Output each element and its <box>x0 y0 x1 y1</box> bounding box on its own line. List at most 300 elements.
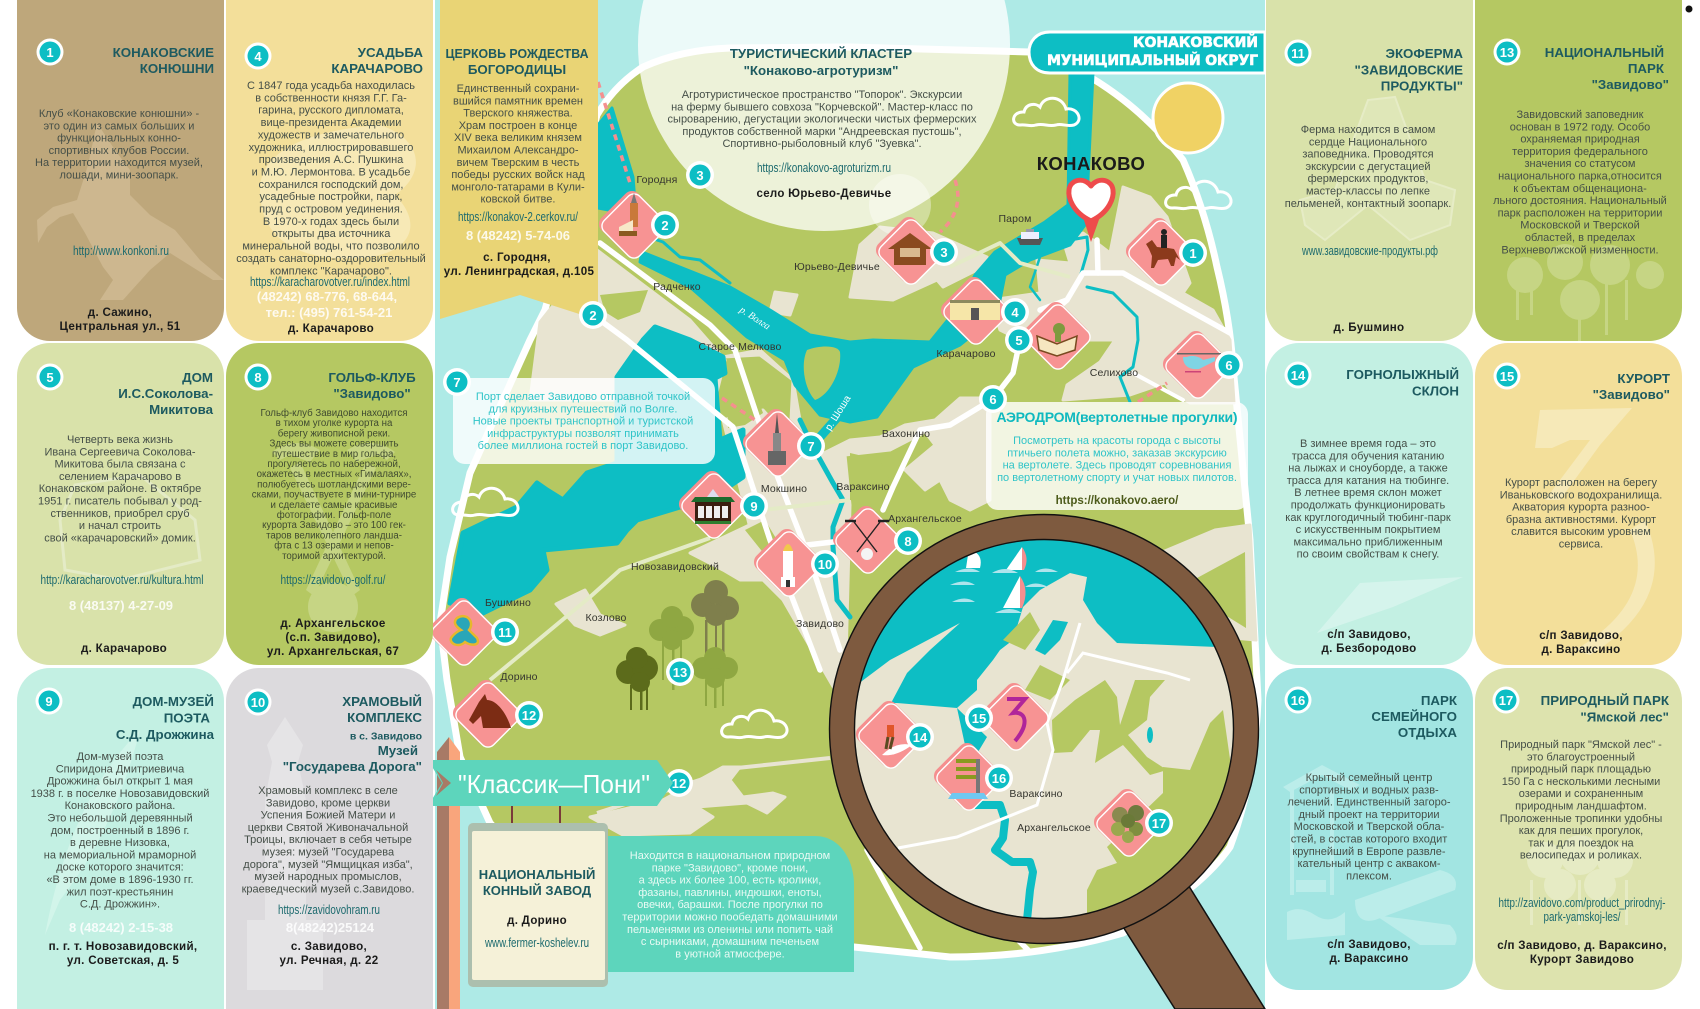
phones: тел.: (495) 761-54-21 <box>266 305 392 320</box>
title pill: municipal district: КОНАКОВСКИЙ <box>1133 34 1258 51</box>
number badges on map: 12 <box>672 776 686 791</box>
marker 17: forest <box>1090 785 1164 859</box>
description: Храм построен в конце <box>459 120 577 132</box>
description: путешествие в мир гольфа, <box>272 449 396 460</box>
address: с. Завидово, <box>291 940 367 953</box>
badge 15 <box>1494 362 1520 390</box>
heading: ГОРНОЛЫЖНЫЙ <box>1346 367 1459 382</box>
heading: ЭКОФЕРМА <box>1385 46 1463 61</box>
panel 14: ski slope <box>1266 343 1473 665</box>
place labels: Селихово <box>1090 367 1138 379</box>
marker 5: book <box>1019 298 1093 372</box>
description: трасса для обучения катанию <box>1292 450 1444 462</box>
panel 15: Zavidovo resort <box>1475 343 1682 665</box>
cluster heading <box>730 46 912 78</box>
description: фта с 13 озерами и непов- <box>274 541 394 552</box>
address: ул. Советская, д. 5 <box>67 954 179 967</box>
number badges on map: 15 <box>972 711 986 726</box>
description: лошади, мини-зоопарк. <box>59 170 179 182</box>
marker 12: horse head <box>449 676 523 750</box>
marker 6: helicopter <box>1159 327 1233 401</box>
description: сервиса. <box>1559 538 1603 550</box>
description: ственников, приобрел сруб <box>50 508 190 520</box>
description: на лыжах и сноуборде, а также <box>1288 463 1448 475</box>
address: с/п Завидово, <box>1327 938 1411 951</box>
description: Курорт расположен на берегу <box>1505 477 1657 489</box>
description: произведения А.С. Пушкина <box>259 154 404 166</box>
heading: КОМПЛЕКС <box>347 710 422 725</box>
badge 5 <box>36 364 64 390</box>
estate silhouette <box>260 125 416 258</box>
description: плексом. <box>1346 870 1392 882</box>
land mass <box>440 47 1258 957</box>
place labels: р. Волга <box>737 304 772 332</box>
description: усадебные постройки, парк, <box>260 191 402 203</box>
number badges on map: 6 <box>1225 358 1233 373</box>
heading: ХРАМОВЫЙ <box>342 694 422 709</box>
secondary roads <box>490 243 1070 813</box>
description: спортивных клубов России. <box>49 145 189 157</box>
green patches <box>600 290 1246 628</box>
badge 10: 10 <box>251 695 265 710</box>
description: Дом-музей поэта <box>77 751 164 763</box>
heading: ПАРК <box>1421 693 1458 708</box>
lens labels <box>1009 788 1091 834</box>
panel 9: Drozhzhin museum <box>17 668 224 1009</box>
description: на мемориальной мраморной <box>44 849 196 861</box>
lens labels: Вараксино <box>1009 788 1063 800</box>
number badges on map: 2 <box>661 218 669 233</box>
description: Микитова была связана с <box>54 459 186 471</box>
description: по своим свойствам к снегу. <box>1297 549 1439 561</box>
panel: pony park text: пельменями из оленины или попить чай <box>627 924 833 936</box>
description: монголо-татарами в Кули- <box>451 181 585 193</box>
hanging sign: stud farm: НАЦИОНАЛЬНЫЙ <box>479 867 595 882</box>
description: экскурсии с дегустацией <box>1305 161 1431 173</box>
callout: port Zavidovo: более миллиона гостей в порт Завидово. <box>478 440 688 452</box>
vertical stripe arrow <box>437 737 460 1009</box>
trees silhouette <box>1507 244 1664 341</box>
description: сками, поучаствуете в мини-турнире <box>252 490 416 501</box>
number badges on map: 14 <box>913 730 928 745</box>
description: селением Карачарово в <box>59 471 181 483</box>
marker 9: museum house <box>675 467 749 541</box>
sailboats <box>950 547 1058 613</box>
description: 1938 г. в поселке Новозавидовский <box>31 788 209 800</box>
ribbon: Classic Pony: "Классик—Пони" <box>458 769 650 799</box>
badge 15: 15 <box>1500 369 1514 384</box>
number badges on map: 7 <box>807 439 815 454</box>
panel: pony park text: территории можно пообедать домашними <box>622 912 838 924</box>
link <box>1498 895 1666 924</box>
map of the district <box>440 0 1258 957</box>
badge 16: 16 <box>1291 693 1305 708</box>
panel 10: temple complex <box>226 668 433 1009</box>
badge 11 <box>1284 40 1312 66</box>
badge 5: 5 <box>46 370 54 385</box>
description: максимально приближенным <box>1293 536 1443 548</box>
callout: aerodrome: https://konakovo.aero/ <box>1056 495 1179 507</box>
number badges on map: 1 <box>1189 246 1197 261</box>
description: так и для поездок на <box>1528 837 1635 849</box>
place labels: Карачарово <box>936 348 996 360</box>
panel: pony park text: Находится в национальном природном <box>630 850 830 862</box>
place labels: Радченко <box>653 281 701 293</box>
description: лечений. Единственный загоро- <box>1287 797 1451 809</box>
description: как круглогодичный тюбинг-парк <box>1285 512 1451 524</box>
hanging sign: stud farm <box>468 806 608 987</box>
description: национального парка,относится <box>1498 170 1662 182</box>
number badges on map: 5 <box>1015 333 1023 348</box>
description: фотографии. Гольф-поле <box>277 510 391 521</box>
description: продолжать функционировать <box>1291 500 1445 512</box>
description: спортивных и водных разв- <box>1299 784 1439 796</box>
place labels: Паром <box>998 213 1032 225</box>
cluster link: https://konakovo-agroturizm.ru <box>757 160 891 175</box>
marker 3: farm house <box>872 213 946 287</box>
pale circle overlay <box>638 0 1010 231</box>
heading <box>446 46 589 77</box>
badge 8 <box>244 364 272 390</box>
address: ул. Архангельская, 67 <box>267 645 399 658</box>
description: дорога", музей "Ямщицкая изба", <box>243 859 413 871</box>
dumpling silhouette <box>1300 97 1455 240</box>
callout: aerodrome: Посмотреть на красоты города с высоты <box>1013 435 1221 447</box>
address: ул. Речная, д. 22 <box>280 954 378 967</box>
church silhouette <box>247 717 323 990</box>
description: Ферма находится в самом <box>1301 124 1435 136</box>
description: Московской и Тверской <box>1520 220 1640 232</box>
description: Четверть века жизнь <box>67 434 173 446</box>
ferry icon <box>1017 229 1043 245</box>
panel 13: national park <box>1475 0 1682 341</box>
Volga river <box>598 73 1093 422</box>
hanging sign: stud farm: КОННЫЙ ЗАВОД <box>483 883 592 898</box>
description: с искусственным покрытием <box>1296 524 1440 536</box>
description: 150 Га с несколькими лесными <box>1502 776 1660 788</box>
number badges on map: 10 <box>818 557 832 572</box>
place labels: Козлово <box>586 612 626 624</box>
place labels: Новозавидовский <box>631 561 719 573</box>
place labels: Мокшино <box>761 483 807 495</box>
place labels: Вараксино <box>836 481 890 493</box>
number badges on map: 12 <box>522 708 536 723</box>
marker 15: ribbon logo <box>977 679 1051 753</box>
description: мастер-классы по лепке <box>1306 186 1430 198</box>
description: велосипедах и роликах. <box>1520 850 1642 862</box>
heading: КУРОРТ <box>1617 371 1670 386</box>
description: художника, иллюстрировавшего <box>249 142 413 154</box>
corner dot <box>1686 6 1692 12</box>
cluster heading: ТУРИСТИЧЕСКИЙ КЛАСТЕР <box>730 46 912 61</box>
badge 4 <box>244 42 272 70</box>
ribbon: Classic Pony <box>428 760 673 806</box>
badge 8: 8 <box>254 370 262 385</box>
number badges on map: 3 <box>696 168 704 183</box>
marker 16: water slide <box>930 739 1004 813</box>
description: В зимнее время года – это <box>1300 438 1436 450</box>
heading: С.Д. Дрожжина <box>116 727 215 742</box>
address: д. Бушмино <box>1334 321 1404 334</box>
phone: 8 (48137) 4-27-09 <box>69 598 173 613</box>
phone: 8 (48242) 2-15-38 <box>69 920 173 935</box>
pink route dashes <box>598 82 1167 422</box>
beige settlements <box>530 187 1256 835</box>
description: Завидовский заповедник <box>1517 109 1644 121</box>
cluster text: на ферму бывшего совхоза "Корчевской". Мастер-класс по <box>671 101 973 113</box>
place labels: Дорино <box>500 671 538 683</box>
heading: "Государева Дорога" <box>283 759 422 774</box>
callout: port Zavidovo: инфраструктуры позволят принимать <box>487 428 679 440</box>
description: Акватория курорта разноо- <box>1512 502 1650 514</box>
number badges on map: 11 <box>498 625 512 640</box>
heading: СЕМЕЙНОГО <box>1371 709 1457 724</box>
panel 5: Sokolov-Mikitov house <box>17 343 224 665</box>
description: комплекс "Карачарово". <box>270 265 392 277</box>
description: вице-президента Академии <box>261 117 401 129</box>
description: бразна активностями. Курорт <box>1506 514 1656 526</box>
address: Курорт Завидово <box>1530 953 1634 966</box>
panel: pony park text <box>608 836 854 972</box>
callout: port Zavidovo <box>453 378 715 464</box>
description: фермерских продуктов, <box>1308 173 1428 185</box>
panel 8: golf club <box>226 343 433 665</box>
place labels: Старое Мелково <box>699 341 782 353</box>
cluster address: село Юрьево-Девичье <box>756 188 892 200</box>
description: создать санаторно-оздоровительный <box>236 253 426 265</box>
heading: УСАДЬБА <box>358 45 423 60</box>
description: Тверского княжества. <box>463 108 573 120</box>
description: это один из самых больших и <box>44 120 194 132</box>
badge 1: 1 <box>46 45 54 60</box>
panel 16: family park <box>1266 668 1473 990</box>
panel: pony park text: фазаны, павлины, индюшки, еноты, <box>638 887 822 899</box>
description: сердце Национального <box>1309 136 1427 148</box>
description: доске которого значится: <box>56 862 184 874</box>
address: д. Вараксино <box>1541 643 1621 656</box>
heading: ПОЭТА <box>164 710 210 726</box>
marker 2: church <box>595 187 669 261</box>
water park silhouette <box>1283 765 1457 945</box>
address: д. Архангельское <box>280 617 386 630</box>
description: торимой архитектурой. <box>282 551 386 562</box>
trees: national park <box>616 580 739 710</box>
address: Центральная ул., 51 <box>59 320 181 333</box>
description: победы русских войск над <box>451 169 585 181</box>
panel 1: Konakovo stables <box>17 0 224 341</box>
badge over banner: 2 <box>589 308 597 323</box>
description: парк расположен на территории <box>1498 207 1662 219</box>
description: Иваньковского водохранилища. <box>1500 489 1662 501</box>
badge 16 <box>1284 686 1312 714</box>
phone: 8(48242)25124 <box>286 920 375 935</box>
place labels: Юрьево-Девичье <box>794 261 880 273</box>
description: XIV века великим князем <box>454 132 582 144</box>
trees silhouette <box>1527 835 1633 925</box>
description: художеств и замечательного <box>258 129 404 141</box>
description: трасса для катания на тюбинге. <box>1287 475 1449 487</box>
description: минеральной воды, что позволило <box>242 241 420 253</box>
description: Троицы, включает в себя четыре <box>244 834 412 846</box>
description: С.Д. Дрожжин». <box>80 899 160 911</box>
number badges on map: 3 <box>940 245 948 260</box>
address: (с.п. Завидово), <box>285 631 381 644</box>
description: природным ландшафтом. <box>1515 800 1647 812</box>
hanging sign: stud farm: д. Дорино <box>507 915 567 927</box>
heading: КАРАЧАРОВО <box>331 61 423 76</box>
heading: КОНЮШНИ <box>140 61 214 76</box>
address: с/п Завидово, <box>1327 628 1411 641</box>
description: в собственности князя Г.Г. Га- <box>255 92 407 104</box>
marker 14: skier <box>852 697 926 771</box>
description: Храмовый комплекс в селе <box>258 785 398 797</box>
link: https://karacharovotver.ru/index.html <box>250 274 410 289</box>
callout: aerodrome: по вертолетному спорту и учат новых пилотов. <box>997 472 1237 484</box>
link: https://konakov-2.cerkov.ru/ <box>458 209 578 224</box>
heading: Музей <box>378 743 418 758</box>
description: окажетесь в местных «Гималаях», <box>257 469 411 480</box>
address: с/п Завидово, <box>1539 629 1623 642</box>
description: к объектам общенациона- <box>1513 183 1647 195</box>
description: Природный парк "Ямской лес" - <box>1500 739 1662 751</box>
description: стей, в состав которого входит <box>1291 834 1447 846</box>
description: Московской и Тверской обла- <box>1294 821 1445 833</box>
description: Конаковского района. <box>65 800 175 812</box>
panel: pony park text: с сырниками, домашним печеньем <box>641 936 819 948</box>
marker 11: dumpling <box>425 594 499 668</box>
badge 14 <box>1284 362 1312 388</box>
marker 4: estate <box>937 273 1011 347</box>
heading: ОТДЫХА <box>1398 725 1457 740</box>
badge 17 <box>1492 686 1520 714</box>
heading: "Завидово" <box>1593 387 1670 402</box>
badge 10 <box>244 688 272 716</box>
badge 9: 9 <box>45 694 53 709</box>
lens content <box>855 540 1233 918</box>
heading: ПРИРОДНЫЙ ПАРК <box>1541 693 1670 708</box>
description: гарина, русского дипломата, <box>258 105 404 117</box>
heading: СКЛОН <box>1412 383 1459 398</box>
cluster text: Спортивно-рыболовный клуб "Зуевка". <box>722 138 922 150</box>
river island <box>804 346 840 400</box>
description: церкви Святой Живоначальной <box>248 822 408 834</box>
heading: ГОЛЬФ-КЛУБ <box>328 370 416 385</box>
description: кательный центр с акваком- <box>1297 858 1441 870</box>
Moscow sea lake <box>450 327 743 613</box>
pale blob near Yuryevo <box>869 174 931 236</box>
sea background <box>435 0 1265 1009</box>
badge 14: 14 <box>1291 368 1306 383</box>
callout: aerodrome <box>986 402 1248 510</box>
number badges on map: 17 <box>1152 816 1166 831</box>
address: д. Сажино, <box>88 306 152 319</box>
place labels: р. Шоша <box>823 393 854 433</box>
marker 10: white bell tower <box>750 525 824 599</box>
panel 11: eco farm <box>1266 0 1473 341</box>
description: Проложенные тропинки удобны <box>1500 813 1662 825</box>
description: территория федерального <box>1512 146 1648 158</box>
heading: "Завидово" <box>1592 77 1669 92</box>
description: сохранился господский дом, <box>259 179 403 191</box>
description: музея: музей "Государева <box>262 846 395 858</box>
description: природный парк площадью <box>1511 764 1651 776</box>
address: д. Карачарово <box>81 642 167 655</box>
address: с. Городня, <box>483 251 551 264</box>
heading: ПРОДУКТЫ" <box>1381 79 1463 94</box>
callout: aerodrome: АЭРОДРОМ(вертолетные прогулки) <box>996 409 1238 425</box>
badge 11: 11 <box>1291 46 1305 61</box>
description: как для пеших прогулок, <box>1519 825 1643 837</box>
description: дный проект на территории <box>1298 809 1440 821</box>
address: п. г. т. Новозавидовский, <box>49 940 197 953</box>
description: значения со статусом <box>1524 158 1636 170</box>
description: Это небольшой деревянный <box>47 812 193 824</box>
description: крупнейший в Европе развле- <box>1292 846 1446 858</box>
description: В 1970-х годах здесь были <box>263 216 399 228</box>
heading: в с. Завидово <box>350 730 422 742</box>
leaf silhouette <box>1317 577 1463 633</box>
description: вичем Тверским в честь <box>457 157 580 169</box>
number badges on map: 4 <box>1011 305 1019 320</box>
description: краеведческий музей с.Завидово. <box>242 883 414 895</box>
number badges on map: 6 <box>989 392 997 407</box>
horse silhouette <box>37 123 224 300</box>
book silhouette <box>60 475 200 580</box>
hanging sign: stud farm: www.fermer-koshelev.ru <box>484 935 589 950</box>
description: в деревне Низовка, <box>70 837 170 849</box>
badge 9 <box>36 688 62 714</box>
sun <box>1153 83 1223 153</box>
description: это благоустроенный <box>1527 751 1635 763</box>
description: «В этом доме в 1896-1930 гг. <box>46 874 194 886</box>
callout: port Zavidovo: Новые проекты транспортной и туристской <box>473 416 693 428</box>
panel 4: Karacharovo estate <box>226 0 433 341</box>
banner: Nativity church <box>440 0 598 320</box>
link: www.завидовские-продукты.рф <box>1301 243 1438 258</box>
description: На территории находится музей, <box>35 157 203 169</box>
panel: pony park text: а здесь их более 100, есть кролики, <box>639 875 821 887</box>
description: открыты два источника <box>272 228 391 240</box>
heading: "Ямской лес" <box>1580 709 1669 724</box>
description: основан в 1972 году. Особо <box>1510 121 1650 133</box>
heading: "Завидово" <box>333 386 411 401</box>
number badges on map: 7 <box>453 375 461 390</box>
panel: pony park text: в уютной атмосфере. <box>675 948 785 960</box>
description: вшийся памятник времен <box>453 95 583 107</box>
description: и сделаете самые красивые <box>271 500 397 511</box>
link: https://zavidovo-golf.ru/ <box>280 572 386 587</box>
heading: ЦЕРКОВЬ РОЖДЕСТВА <box>446 46 589 61</box>
link: http://karacharovotver.ru/kultura.html <box>40 572 204 587</box>
link: http://www.konkoni.ru <box>73 243 169 258</box>
cluster text: продуктов собственной марки "Андреевская пустошь", <box>682 126 962 138</box>
description: охраняемая природная <box>1520 134 1640 146</box>
panel: pony park text: парке "Завидово", кроме пони, <box>652 862 808 874</box>
marker 7: tall bell tower <box>739 405 813 479</box>
description: свой «карачаровский» домик. <box>44 532 196 544</box>
description: заповедника. Проводятся <box>1302 149 1434 161</box>
description: ковской битве. <box>481 194 555 206</box>
description: С 1847 года усадьба находилась <box>247 80 415 92</box>
heading: И.С.Соколова- <box>118 386 213 401</box>
description: Ивана Сергеевича Соколова- <box>44 446 196 458</box>
description: В летнее время склон может <box>1294 487 1442 499</box>
golf silhouette <box>272 443 395 632</box>
panel: pony park text: овечки, барашки. После прогулки по <box>637 899 823 911</box>
magnifier ring <box>842 527 1246 931</box>
description: Гольф-клуб Завидово находится <box>261 408 407 419</box>
description: берегу живописной реки. <box>278 428 390 439</box>
